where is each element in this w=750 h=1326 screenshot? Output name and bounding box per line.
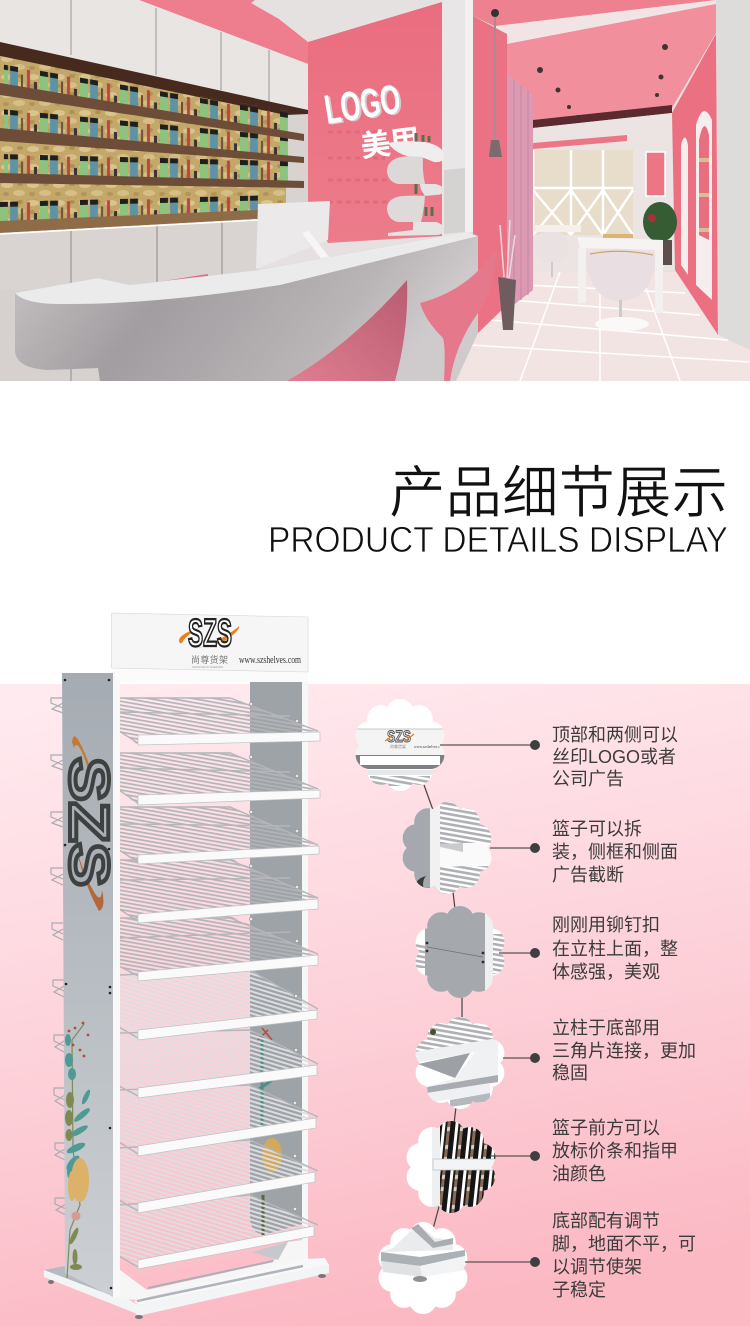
title: 产品细节展示	[389, 461, 728, 524]
note: adjustable foot: 脚，地面不平，可	[552, 1234, 696, 1254]
note: rivets: 刚刚用铆钉扣	[552, 915, 660, 935]
detail icon: adjustable foot	[378, 1222, 468, 1314]
note: logo printing: 顶部和两侧可以	[552, 725, 678, 745]
note: logo printing: 公司广告	[552, 769, 624, 789]
note: detachable basket: 广告截断	[552, 865, 624, 885]
side flower print	[64, 1022, 92, 1278]
sign brand name: 尚尊货架	[191, 654, 228, 665]
note: price strip	[552, 1118, 678, 1184]
detail icon: rivets on column	[416, 906, 504, 998]
back panel flower print	[258, 1028, 282, 1235]
upper white cabinets	[0, 0, 308, 112]
bolts	[249, 702, 299, 1211]
white column	[442, 0, 473, 236]
side logo	[58, 736, 121, 911]
note: triangle bracket: 三角片连接，更加	[552, 1041, 696, 1061]
back panel	[250, 682, 302, 1234]
note: rivets: 体感强，美观	[552, 962, 660, 982]
white ceiling soffit	[251, 0, 440, 40]
detail icon: triangle bracket	[416, 1017, 504, 1109]
note: price strip: 放标价条和指甲	[552, 1141, 678, 1161]
curtain	[507, 73, 533, 310]
note: price strip: 篮子前方可以	[552, 1118, 660, 1138]
wall logo text: LOGO	[323, 77, 405, 134]
sign brand pinyin: SHANGZUN SHELVES	[192, 665, 223, 669]
pink wall ornament	[646, 152, 665, 196]
connector lines between detail icons	[424, 785, 462, 1229]
top sign board	[112, 612, 308, 682]
front table	[577, 234, 663, 313]
note: rivets	[552, 915, 678, 982]
orange arcs	[72, 736, 92, 772]
basket rails	[119, 698, 318, 1267]
corridor back wall	[533, 113, 676, 272]
note: detachable basket: 篮子可以拆	[552, 819, 642, 839]
note: triangle bracket: 立柱于底部用	[552, 1018, 660, 1038]
right white wall	[716, 0, 750, 350]
monitor	[256, 201, 330, 269]
brown wooden shelves	[0, 83, 304, 233]
reception counter	[15, 232, 478, 381]
title	[268, 461, 728, 560]
detail icon: top sign	[356, 699, 444, 791]
brown band above shelves	[0, 42, 308, 116]
wall logo text: LOGO	[321, 76, 403, 133]
note: detachable basket: 装，侧框和侧面	[552, 842, 678, 862]
note: adjustable foot: 子稳定	[552, 1280, 606, 1300]
front shelf bars	[138, 732, 320, 1269]
detail icon: basket front price strip	[406, 1121, 496, 1213]
cream doors	[533, 150, 633, 235]
left white frame column	[113, 668, 120, 1298]
wall return	[286, 114, 308, 205]
pink gradient background panel	[0, 684, 750, 1326]
left side wire ends	[51, 698, 66, 1215]
tiled floor	[455, 272, 750, 381]
note: rivets: 在立柱上面，整	[552, 939, 678, 959]
pink logo wall	[308, 2, 442, 243]
plant	[643, 202, 677, 265]
detail icon: top sign: SZS	[387, 727, 411, 746]
detail icon: detachable basket	[402, 802, 492, 894]
detail icon: top sign: www.szshelves.c	[414, 745, 440, 749]
pink chairs	[287, 247, 497, 381]
note: adjustable foot: 以调节使架	[552, 1257, 642, 1277]
small pink chair behind counter	[145, 274, 208, 284]
note: logo printing: 丝印LOGO或者	[552, 747, 676, 767]
S-shaped display stand	[387, 133, 444, 236]
corridor ceiling	[473, 0, 716, 128]
SZS letters: SZS	[58, 757, 121, 887]
leader lines and dots	[440, 740, 540, 1267]
note: logo printing	[552, 725, 678, 789]
lower white cabinets	[0, 219, 258, 381]
note: triangle bracket: 稳固	[552, 1063, 588, 1083]
wall relief marks	[328, 132, 395, 202]
ceiling pink strip	[139, 0, 308, 64]
sign logo letters: SZS	[188, 612, 232, 655]
note: adjustable foot	[552, 1211, 696, 1300]
note: detachable basket	[552, 819, 678, 885]
wall logo text: 美甲	[359, 124, 422, 164]
right frame column	[302, 670, 308, 1260]
back table and chair	[535, 225, 581, 277]
note: adjustable foot: 底部配有调节	[552, 1211, 660, 1231]
note: triangle bracket	[552, 1018, 696, 1083]
product rack	[44, 612, 329, 1319]
gold shelf wall	[0, 56, 286, 224]
sign url: www.szshelves.com	[239, 655, 301, 666]
side panel rivets	[64, 679, 112, 1289]
note: price strip: 油颜色	[552, 1164, 606, 1184]
wire baskets	[119, 698, 316, 1269]
left side panel	[62, 673, 113, 1297]
floor vase	[498, 220, 516, 330]
right pink display wall	[672, 34, 718, 335]
wall logo text	[321, 76, 422, 164]
hero photo: nail salon interior	[0, 0, 750, 381]
pink side wall	[473, 16, 507, 333]
product rows	[0, 63, 288, 222]
detail icon: top sign: 尚尊货架	[390, 743, 406, 749]
sign logo arc	[179, 626, 239, 648]
front white chair	[586, 249, 655, 331]
base frame	[44, 1240, 329, 1319]
hanging lamp	[489, 9, 502, 157]
